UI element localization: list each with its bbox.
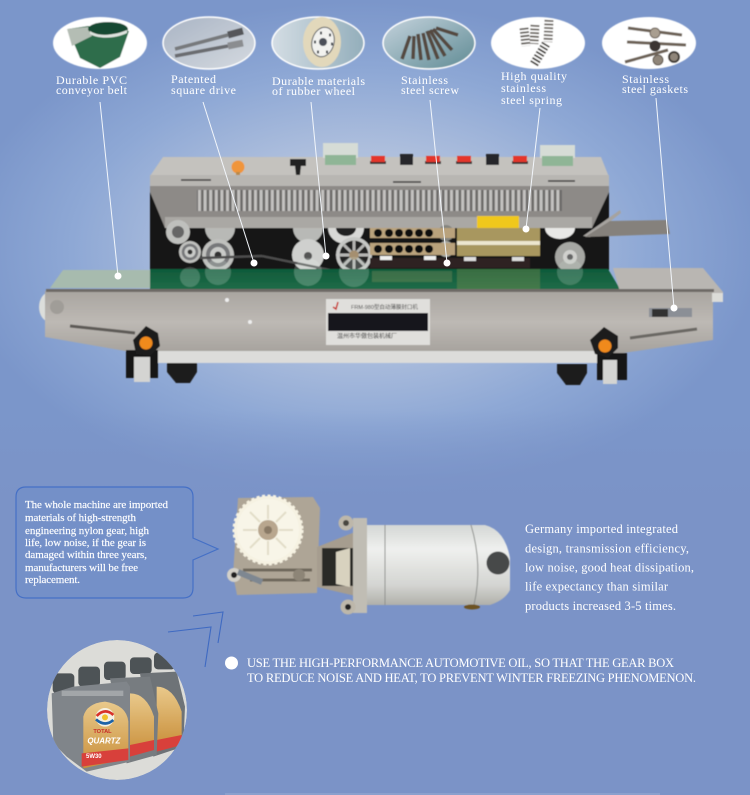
leader: conveyor belt xyxy=(100,102,122,280)
label: steel screw: Stainless xyxy=(401,73,448,87)
machine: left foot and knob xyxy=(126,326,197,383)
label: steel gaskets: Stainless xyxy=(622,72,669,86)
labels: component captions xyxy=(56,69,688,107)
machine: name plate xyxy=(326,299,430,345)
label: steel spring: stainless xyxy=(501,81,546,95)
machine: translucent belt left xyxy=(50,270,150,288)
callout text: The whole machine are imported xyxy=(25,499,168,511)
machine: perforated plates xyxy=(370,228,455,255)
label: square drive: square drive xyxy=(171,83,236,97)
motor: cylinder body xyxy=(367,525,510,605)
callout: nylon gear xyxy=(16,487,218,598)
machine: green belt xyxy=(150,269,620,289)
motor: end knob xyxy=(486,552,510,574)
oil: back caps xyxy=(53,653,176,693)
motor: white nylon gear xyxy=(234,496,302,564)
machine: output flap xyxy=(583,210,670,237)
machine: vent cover xyxy=(150,186,609,228)
machine: slots and bolts xyxy=(50,293,723,338)
motor: mounting ears xyxy=(227,568,305,582)
machine: right foot and knob xyxy=(557,327,627,385)
callout text: manufacturers will be free xyxy=(25,562,138,574)
callout text: damaged within three years, xyxy=(25,549,147,561)
photo: square drive xyxy=(163,17,255,69)
text: motor description: products increased 3-5 times. xyxy=(525,599,676,613)
photo: PVC conveyor belt xyxy=(53,17,147,69)
oil: third bottle xyxy=(140,672,185,757)
oil: front bottle: TOTAL xyxy=(93,729,112,735)
text: oil description: USE THE HIGH-PERFORMANCE AUTOMOTIVE OIL, SO THAT THE GEAR BOX xyxy=(247,656,674,670)
text: motor description: low noise, good heat dissipation, xyxy=(525,560,694,574)
machine: green boxes xyxy=(323,143,575,166)
label: steel screw: steel screw xyxy=(401,83,459,97)
text: oil description: TO REDUCE NOISE AND HEAT, TO PREVENT WINTER FREEZING PHENOMENON. xyxy=(247,671,696,685)
leader: square drive xyxy=(203,102,258,266)
photo: motor oil bottles xyxy=(47,640,187,780)
text: motor description: design, transmission efficiency, xyxy=(525,542,689,556)
label: rubber wheel: of rubber wheel xyxy=(272,84,356,98)
oil: second bottle xyxy=(110,677,158,763)
machine: control switches xyxy=(232,154,528,182)
photo: stainless steel gaskets xyxy=(602,17,696,69)
oil: front bottle: 5W30 xyxy=(86,754,102,760)
arrow: double chevron xyxy=(168,612,223,667)
callout text: materials of high-strength xyxy=(25,512,136,524)
motor: foot xyxy=(464,604,480,610)
oil: front bottle xyxy=(52,682,130,772)
machine: belt reflections xyxy=(180,257,583,289)
leader: steel screw xyxy=(430,100,450,266)
bullet xyxy=(225,656,238,670)
leader: steel spring xyxy=(522,108,540,232)
photo: rubber wheel xyxy=(272,17,364,69)
motor: coupling housing xyxy=(317,530,360,597)
machine: left roller xyxy=(39,292,61,322)
label: steel gaskets: steel gaskets xyxy=(622,82,688,96)
machine: wheels xyxy=(166,220,585,273)
cropped next section hint xyxy=(225,793,660,795)
label: square drive: Patented xyxy=(171,72,216,86)
machine: name plate: FRM-980型自动薄膜封口机 xyxy=(351,303,418,311)
machine: bottom strip xyxy=(158,351,597,363)
illustration: band sealing machine xyxy=(39,143,723,385)
photo: stainless steel screw xyxy=(383,17,475,69)
photo: stainless steel spring xyxy=(491,17,585,69)
leader: rubber wheel xyxy=(311,102,330,260)
machine: name plate: 温州市华傲包装机械厂 xyxy=(337,332,397,340)
machine: heating block xyxy=(457,228,540,256)
leader lines and dots xyxy=(100,98,678,312)
text: motor description: life expectancy than similar xyxy=(525,580,669,594)
label: steel spring: High quality xyxy=(501,69,567,83)
panel: component photos xyxy=(53,17,696,69)
motor: flange xyxy=(338,516,367,614)
callout text: life, low noise, if the gear is xyxy=(25,537,146,549)
label: PVC conveyor belt: conveyor belt xyxy=(56,83,128,97)
illustration: gear motor xyxy=(227,496,510,614)
motor: gearbox housing xyxy=(233,497,320,595)
label: PVC conveyor belt: Durable PVC xyxy=(56,73,127,87)
callout text: engineering nylon gear, high xyxy=(25,525,150,537)
machine: black side panel xyxy=(150,190,609,270)
machine: warning label xyxy=(477,216,519,228)
machine: front strip xyxy=(150,175,609,188)
leader: steel gaskets xyxy=(656,98,678,312)
machine: main stainless body xyxy=(45,291,713,353)
machine: roller bar xyxy=(370,256,530,268)
oil: front bottle: QUARTZ xyxy=(87,737,122,746)
machine: right top plate xyxy=(613,268,723,302)
callout text: replacement. xyxy=(25,574,80,586)
machine: vent slots xyxy=(197,190,562,211)
machine: top plate xyxy=(150,157,609,177)
label: steel spring: steel spring xyxy=(501,93,562,107)
text: motor description: Germany imported integrated xyxy=(525,522,679,536)
label: rubber wheel: Durable materials xyxy=(272,74,365,88)
